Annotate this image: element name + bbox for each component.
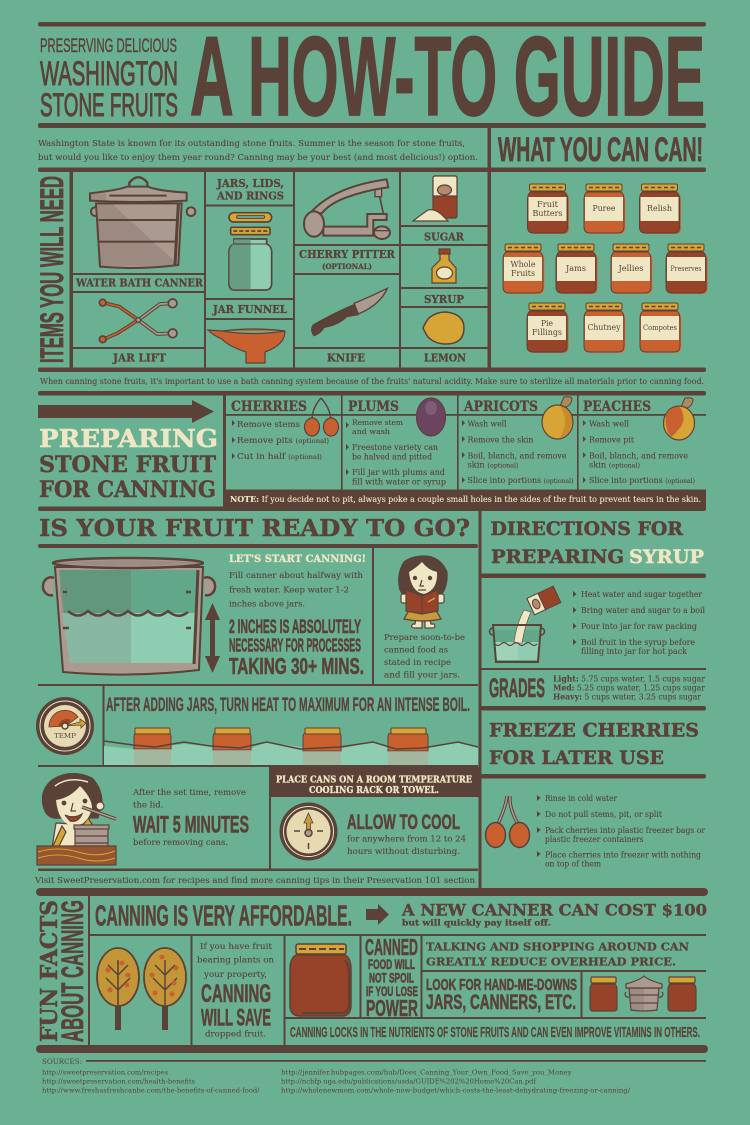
label: cherry pitter <box>299 248 396 271</box>
callout: talking and shopping: TALKING AND SHOPPING AROUND CAN <box>426 940 689 954</box>
jar: preserves: Preserves <box>670 265 702 273</box>
heading: preparing stone fruit for canning: FOR CANNING <box>39 477 216 503</box>
heading: items you will need: ITEMS YOU WILL NEED <box>34 176 70 363</box>
callout: 2 inches: 2 INCHES IS ABSOLUTELY <box>229 616 361 638</box>
callout: new canner cost <box>401 901 707 928</box>
jar: jams: Jams <box>565 264 586 273</box>
list: freezing steps: plastic freezer containers <box>545 835 644 845</box>
callout: talking and shopping <box>426 940 689 969</box>
arrow <box>38 400 214 423</box>
illustration: big jar <box>290 944 351 1016</box>
banner: place cans: PLACE CANS ON A ROOM TEMPERATURE <box>276 776 472 786</box>
text: fruit bearing plants: WILL SAVE <box>201 1005 271 1032</box>
icon: knife <box>312 288 387 336</box>
subtitle: PRESERVING DELICIOUS <box>40 36 177 57</box>
icon: lemon <box>423 312 464 344</box>
callout: wait 5 minutes: WAIT 5 MINUTES <box>133 812 249 839</box>
jar: pie fillings: Pie <box>541 319 553 328</box>
illustration: girl reading recipe <box>399 556 447 628</box>
note bar <box>226 490 706 508</box>
sources <box>42 1057 631 1094</box>
list: syrup steps: Heat water and sugar together <box>581 590 703 600</box>
jar: fruit butters: Fruit <box>537 200 559 209</box>
panel: wait 5 minutes <box>37 773 249 865</box>
subtitle: WASHINGTON <box>40 55 178 93</box>
heading: freeze cherries: FOR LATER USE <box>489 747 664 769</box>
text: grade ratios: Med: 5.25 cups water, 1.25 cups sugar <box>553 684 706 694</box>
illustration: fruit trees <box>97 948 186 1030</box>
source links: right column: http://wholenewmom.com/whole-new-budget/which-costs-the-least-dehydrating-freezing-or-canning/ <box>281 1086 631 1094</box>
source links: right column <box>281 1068 631 1094</box>
icon: cherries <box>486 796 530 848</box>
text: fruit bearing plants: If you have fruit <box>200 942 273 952</box>
jar: whole fruits <box>503 244 544 294</box>
heading: fun facts about canning: ABOUT CANNING <box>54 900 90 1042</box>
label: cherry pitter: (OPTIONAL) <box>322 262 372 271</box>
text: fruit bearing plants: your property, <box>203 970 267 980</box>
column: plums: PLUMS <box>348 399 399 415</box>
label: water bath canner: WATER BATH CANNER <box>75 276 204 290</box>
panel: preparing stone fruit <box>38 397 706 508</box>
column: peaches: Slice into portions (optional) <box>589 476 695 486</box>
jar: jellies <box>611 244 652 294</box>
icon: syrup bottle <box>432 249 456 283</box>
source links: left column: http://sweetpreservation.com/recipes <box>42 1068 168 1076</box>
source links: right column: http://jennifer.hubpages.com/hub/Does_Canning_Your_Own_Food_Save_you_Money <box>281 1068 572 1076</box>
heading: preparing stone fruit for canning <box>39 424 218 503</box>
callout: canned food will not spoil: CANNED <box>365 934 418 960</box>
list: syrup steps: Bring water and sugar to a boil <box>581 606 705 616</box>
callout: hand me downs: JARS, CANNERS, ETC. <box>426 991 576 1014</box>
text: cooling time: for anywhere from 12 to 24 <box>347 835 466 845</box>
callout: 2 inches <box>229 616 364 679</box>
callout: new canner cost: A NEW CANNER CAN COST $100 <box>401 901 707 920</box>
column: peaches: skin (optional) <box>589 460 640 470</box>
panel: temperature boil <box>36 694 478 765</box>
column: apricots: Slice into portions (optional) <box>468 476 574 486</box>
subtitle: STONE FRUITS <box>40 87 178 123</box>
text: fruit bearing plants: dropped fruit. <box>205 1030 266 1040</box>
heading: fun facts about canning: FUN FACTS <box>36 900 63 1042</box>
jar: pie fillings <box>527 303 568 353</box>
heading: fun facts about canning <box>36 900 90 1042</box>
illustration: large pot with water <box>43 558 215 675</box>
callout: affordable: CANNING IS VERY AFFORDABLE. <box>95 901 352 933</box>
label: syrup: SYRUP <box>424 293 464 306</box>
label: jars lids rings <box>216 177 284 202</box>
illustration: jars and canner <box>590 976 696 1011</box>
text: grade ratios <box>553 674 706 702</box>
illustration: jars in boiling water <box>104 728 478 765</box>
arrow: block <box>366 904 389 925</box>
jar: whole fruits: Whole <box>510 260 536 269</box>
column: plums: fill with water or syrup <box>352 478 447 488</box>
label: jar lift: JAR LIFT <box>112 352 167 364</box>
callout: hand me downs: LOOK FOR HAND-ME-DOWNS <box>426 977 577 994</box>
icon: temperature gauge <box>36 697 94 755</box>
intro paragraph: but would you like to enjoy them year round? Canning may be your best (and most delicious!) option. <box>38 152 478 163</box>
column: plums: and wash <box>352 427 390 436</box>
icon: sugar bag <box>413 176 457 221</box>
jar: whole fruits: Fruits <box>511 269 535 278</box>
label: jars lids rings: JARS, LIDS, <box>216 177 284 190</box>
column: apricots: APRICOTS <box>463 399 538 415</box>
panel: fun facts <box>36 900 707 1042</box>
list: syrup steps: Pour into jar for raw packing <box>581 622 698 632</box>
jar: puree <box>584 184 626 234</box>
column: apricots: skin (optional) <box>468 460 519 470</box>
illustration: woman with pot <box>37 773 116 865</box>
text: after the set time: the lid. <box>133 800 164 810</box>
text: fruit bearing plants: CANNING <box>201 981 271 1008</box>
column: cherries: Cut in half (optional) <box>237 452 322 462</box>
source links: left column: http://sweetpreservation.com/health-benefits <box>42 1078 195 1086</box>
text: after the set time: After the set time, remove <box>132 788 246 798</box>
label: knife: KNIFE <box>327 352 365 364</box>
callout: allow to cool: ALLOW TO COOL <box>347 811 460 834</box>
panel: items grid <box>75 176 466 364</box>
text: prepare soon to be: canned food as <box>384 646 448 656</box>
icon: jar funnel <box>208 329 285 363</box>
heading: directions for preparing syrup: DIRECTIONS FOR <box>490 519 684 540</box>
panel: directions for syrup <box>490 519 705 662</box>
label: sources: SOURCES: <box>42 1057 82 1066</box>
callout: canned food will not spoil: NOT SPOIL <box>369 971 414 986</box>
column: apricots: Boil, blanch, and remove <box>468 452 566 462</box>
column: peaches: PEACHES <box>583 399 651 415</box>
panel: freeze cherries <box>486 720 706 870</box>
heading: directions for preparing syrup: PREPARING <box>491 547 624 568</box>
column: plums: be halved and pitted <box>352 452 432 462</box>
icon: double arrow <box>205 603 220 673</box>
text: fruit bearing plants <box>197 942 275 1040</box>
text: bath canning note: When canning stone fruits, it's important to use a bath canning system because of the fruits' natural acidity. Make sure to sterilize all materials prior to canning food. <box>40 377 704 387</box>
list: freezing steps <box>537 794 706 870</box>
banner: place cans <box>270 767 479 797</box>
column: peaches: Wash well <box>589 420 629 430</box>
icon: jar with lid and ring <box>229 213 272 290</box>
text: fill canner: Fill canner about halfway with <box>229 571 364 581</box>
text: fill canner: fresh water. Keep water 1-2 <box>229 586 349 596</box>
column: cherries: Remove stems <box>237 420 300 430</box>
panel: cool cans <box>270 767 479 860</box>
column: peaches: Boil, blanch, and remove <box>589 452 688 462</box>
jar: compotes: Compotes <box>643 323 677 332</box>
note bar: NOTE: If you decide not to pit, always poke a couple small holes in the sides of the fruit to prevent tears in the skin. <box>230 495 701 505</box>
column: apricots: Wash well <box>468 420 507 430</box>
text: fill canner: inches above jars. <box>229 600 305 610</box>
callout: canned food will not spoil: IF YOU LOSE <box>366 984 418 999</box>
heading: directions for preparing syrup <box>490 519 704 568</box>
callout: talking and shopping: GREATLY REDUCE OVERHEAD PRICE. <box>426 955 676 969</box>
column: peaches: Remove pit <box>589 436 635 446</box>
text: after the set time <box>132 788 246 810</box>
column: cherries: Remove pits (optional) <box>237 436 329 446</box>
source links: left column: http://www.freshasfreshcanbe.com/the-benefits-of-canned-food/ <box>42 1086 260 1094</box>
jar: jams <box>556 244 598 294</box>
panel: grades <box>489 673 706 703</box>
heading: freeze cherries: FREEZE CHERRIES <box>489 720 699 742</box>
illustration: syrup pouring into pot <box>490 586 561 662</box>
list: freezing steps: Do not pull stems, pit, or split <box>545 810 663 820</box>
column: plums: Remove stem <box>352 418 404 427</box>
text: cooling time <box>347 835 466 857</box>
heading: freeze cherries <box>489 720 699 769</box>
column: cherries: CHERRIES <box>231 399 307 415</box>
text: before removing cans: before removing cans. <box>133 838 228 848</box>
text: prepare soon to be <box>384 633 465 680</box>
heading: preparing stone fruit for canning: PREPARING <box>39 424 218 453</box>
jar: preserves <box>666 244 708 294</box>
icon: clock <box>280 802 338 860</box>
list: syrup steps <box>573 590 705 657</box>
label: sugar: SUGAR <box>424 230 465 244</box>
list: freezing steps: Place cherries into freezer with nothing <box>545 850 701 860</box>
label: jar funnel: JAR FUNNEL <box>212 303 287 316</box>
text: cooling time: hours without disturbing. <box>347 847 460 857</box>
panel: grades: GRADES <box>489 673 545 703</box>
jar: pie fillings: Fillings <box>532 328 562 337</box>
list: syrup steps: filling into jar for hot pack <box>581 647 688 657</box>
jar: jellies: Jellies <box>617 264 644 273</box>
label: lemon: LEMON <box>424 352 466 364</box>
text: fruit bearing plants: bearing plants on <box>197 956 275 966</box>
heading: preparing stone fruit for canning: STONE FRUIT <box>39 452 217 478</box>
jar: chutney <box>584 303 626 353</box>
column: apricots: Remove the skin <box>468 436 534 446</box>
icon: temperature gauge: TEMP <box>54 733 76 740</box>
jar: fruit butters <box>528 184 569 234</box>
callout: hand me downs <box>426 977 577 1014</box>
jar: chutney: Chutney <box>588 323 621 332</box>
icon: jar lift <box>99 299 177 343</box>
list: freezing steps: Rinse in cold water <box>545 794 618 804</box>
column: cherries <box>231 398 338 462</box>
text: visit sweetpreservation: Visit SweetPreservation.com for recipes and find more canning tips in their Preservation 101 section <box>34 876 476 886</box>
heading: is your fruit ready: IS YOUR FRUIT READY TO GO? <box>39 515 470 542</box>
callout: new canner cost: but will quickly pay itself off. <box>402 918 551 928</box>
text: prepare soon to be: stated in recipe <box>384 658 451 668</box>
icon: water bath canner <box>90 177 195 268</box>
list: syrup steps: Boil fruit in the syrup before <box>581 638 695 648</box>
intro paragraph: Washington State is known for its outstanding stone fruits. Summer is the season for stone fruits, <box>38 139 465 149</box>
callout: canned food will not spoil <box>365 934 418 1021</box>
text: fill canner <box>229 571 364 610</box>
jar: puree: Puree <box>592 204 616 213</box>
banner: place cans: COOLING RACK OR TOWEL. <box>309 786 439 796</box>
list: freezing steps: Pack cherries into plastic freezer bags or <box>545 826 706 836</box>
jar: relish <box>640 184 681 234</box>
text: grade ratios: Light: 5.75 cups water, 1.5 cups sugar <box>553 674 706 684</box>
column: peaches <box>583 398 695 486</box>
intro paragraph <box>38 139 478 163</box>
column: apricots <box>462 397 574 486</box>
list: freezing steps: on top of them <box>545 860 601 870</box>
text: lets start canning: LET'S START CANNING! <box>229 554 366 565</box>
text: prepare soon to be: Prepare soon-to-be <box>384 633 465 643</box>
callout: 2 inches: TAKING 30+ MINS. <box>229 653 364 679</box>
source links: left column <box>42 1068 260 1094</box>
heading: directions for preparing syrup: SYRUP <box>629 547 704 568</box>
panel: start canning: NECESSARY FOR PROCESSES <box>229 636 361 656</box>
label: cherry pitter: CHERRY PITTER <box>299 248 396 261</box>
source links: right column: http://nchfp.uga.edu/publications/usda/GUIDE%202%20Home%20Can.pdf <box>281 1078 537 1086</box>
subtitle <box>40 36 178 123</box>
text: grade ratios: Heavy: 5 cups water, 3.25 cups sugar <box>553 692 702 702</box>
column: plums: Freestone variety can <box>352 443 438 453</box>
column: plums <box>346 398 447 488</box>
panel: start canning <box>43 554 465 680</box>
column: plums: Fill jar with plums and <box>352 468 446 478</box>
callout: canned food will not spoil: FOOD WILL <box>368 957 415 972</box>
callout: canned food will not spoil: POWER <box>366 995 418 1021</box>
label: jars lids rings: AND RINGS <box>216 190 284 202</box>
title block <box>40 13 705 139</box>
icon: cherry pitter <box>304 179 390 239</box>
jar: compotes <box>640 303 682 353</box>
jar: relish: Relish <box>647 204 672 213</box>
jar: fruit butters: Butters <box>532 209 562 218</box>
panel: what you can can jars <box>503 184 708 353</box>
text: prepare soon to be: and fill your jars. <box>384 670 460 680</box>
